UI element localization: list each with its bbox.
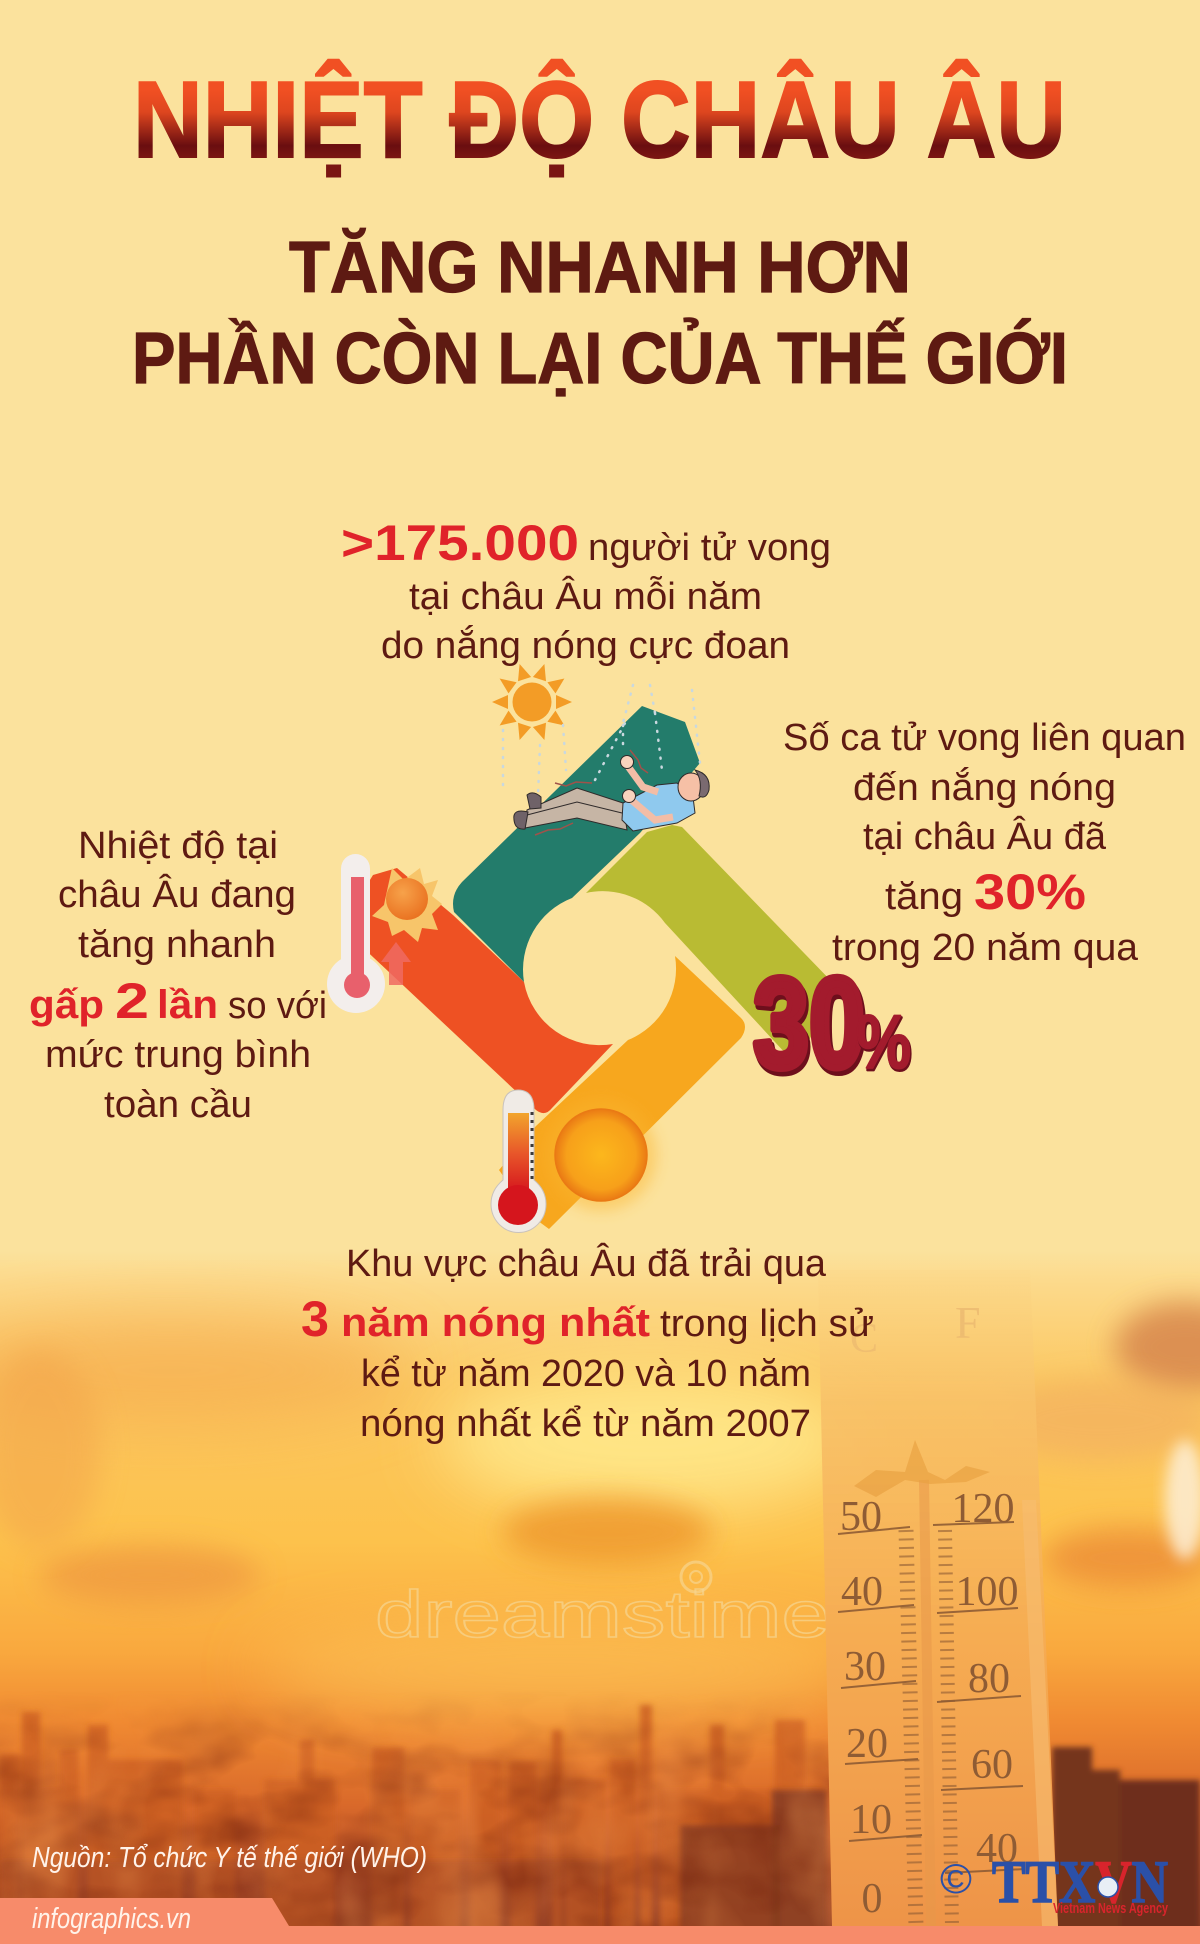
text block: twice the global rate: 2: [115, 973, 149, 1029]
mottled haze and smoke texture: [0, 1700, 830, 1930]
text block: deaths per year: người tử vong: [588, 527, 831, 569]
text block: twice the global rate: mức trung bình: [45, 1034, 311, 1076]
icon: thermometer and small sun, left: [327, 854, 442, 1013]
icon: large sun: [545, 1099, 657, 1211]
segment: olive: [586, 825, 835, 1060]
text block: deaths up 30 percent: đến nắng nóng: [853, 766, 1116, 809]
thermometer background panel: 120: [952, 1486, 1014, 1532]
text block: twice the global rate: gấp: [29, 983, 104, 1027]
thermometer background panel: 80: [968, 1656, 1010, 1702]
diagram: four-segment diamond: [327, 664, 912, 1233]
footer bar with site tab: [0, 1898, 1200, 1944]
logo: TTXVN: TTXVN: [992, 1849, 1168, 1915]
text block: deaths up 30 percent: 30%: [974, 864, 1086, 920]
segment: amber: [499, 956, 745, 1229]
text block: hottest years: 3: [301, 1291, 329, 1347]
text block: deaths per year: tại châu Âu mỗi năm: [409, 575, 762, 618]
text block: hottest years: [301, 1242, 874, 1445]
thermometer background panel: 40: [841, 1569, 883, 1615]
subtitle: PHẦN CÒN LẠI CỦA THẾ GIỚI: [132, 318, 1068, 399]
source note: Nguồn: Tổ chức Y tế thế giới (WHO): [32, 1842, 427, 1874]
watermark: dreamstime: dreamstime: [375, 1577, 830, 1651]
icon: man lying down: [514, 750, 709, 835]
text block: hottest years: kể từ năm 2020 và 10 năm: [361, 1353, 811, 1395]
text block: hottest years: nóng nhất kể từ năm 2007: [360, 1403, 811, 1445]
text block: deaths per year: >175.000: [341, 515, 579, 571]
text block: deaths per year: [341, 515, 831, 667]
subtitle: TĂNG NHANH HƠN: [289, 228, 911, 308]
thermometer background panel: [818, 1270, 1058, 1926]
icon: thermometer, bottom: [491, 1090, 546, 1233]
thermometer background panel: 60: [971, 1742, 1013, 1788]
text block: twice the global rate: Nhiệt độ tại: [78, 825, 278, 867]
city skyline: [0, 1705, 820, 1944]
text block: hottest years: Khu vực châu Âu đã trải qua: [346, 1242, 827, 1285]
segment: teal: [453, 706, 700, 982]
text block: deaths up 30 percent: [783, 717, 1186, 969]
text block: twice the global rate: toàn cầu: [104, 1084, 252, 1126]
text block: hottest years: trong lịch sử: [660, 1303, 874, 1345]
right and foreground buildings: [0, 1747, 1200, 1940]
text block: deaths up 30 percent: tăng: [885, 876, 963, 918]
thermometer background panel: 30: [844, 1644, 886, 1690]
thermometer background panel: 10: [850, 1797, 892, 1843]
text block: twice the global rate: tăng nhanh: [78, 924, 276, 966]
text block: deaths up 30 percent: tại châu Âu đã: [863, 815, 1107, 858]
background photo: heat haze over city: [0, 1250, 1200, 1944]
title: NHIỆT ĐỘ CHÂU ÂU: [133, 59, 1066, 181]
text block: twice the global rate: lần: [157, 983, 218, 1027]
icon: 30 percent 3D numeral: 30: [755, 956, 867, 1099]
thermometer background panel: 40: [976, 1826, 1018, 1872]
thermometer background panel: 0: [862, 1876, 882, 1922]
segment: red-orange: [341, 868, 613, 1113]
text block: twice the global rate: [29, 825, 327, 1126]
icon: sun with dotted heat lines: [492, 664, 700, 795]
text block: deaths up 30 percent: trong 20 năm qua: [832, 927, 1139, 969]
logo: TTXVN: ©: [940, 1855, 972, 1902]
text block: hottest years: năm nóng nhất: [341, 1301, 650, 1345]
subtitle: [132, 228, 1068, 399]
text block: twice the global rate: châu Âu đang: [58, 873, 296, 916]
watermark: dreamstime: [378, 1560, 826, 1638]
thermometer background panel: 50: [840, 1494, 882, 1540]
thermometer background panel: F: [955, 1297, 981, 1348]
thermometer background panel: C: [850, 1316, 878, 1362]
thermometer background panel: 20: [846, 1721, 888, 1767]
icon: 30 percent 3D numeral: %: [856, 1000, 911, 1085]
icon: 30 percent 3D numeral: %: [857, 1002, 912, 1087]
text block: deaths up 30 percent: Số ca tử vong liên quan: [783, 717, 1186, 759]
thermometer background panel: 100: [956, 1569, 1018, 1615]
text block: twice the global rate: so với: [228, 985, 327, 1027]
text block: deaths per year: do nắng nóng cực đoan: [381, 624, 790, 667]
icon: 30 percent 3D numeral: 30: [753, 952, 865, 1095]
site name: infographics.vn: [32, 1903, 191, 1935]
